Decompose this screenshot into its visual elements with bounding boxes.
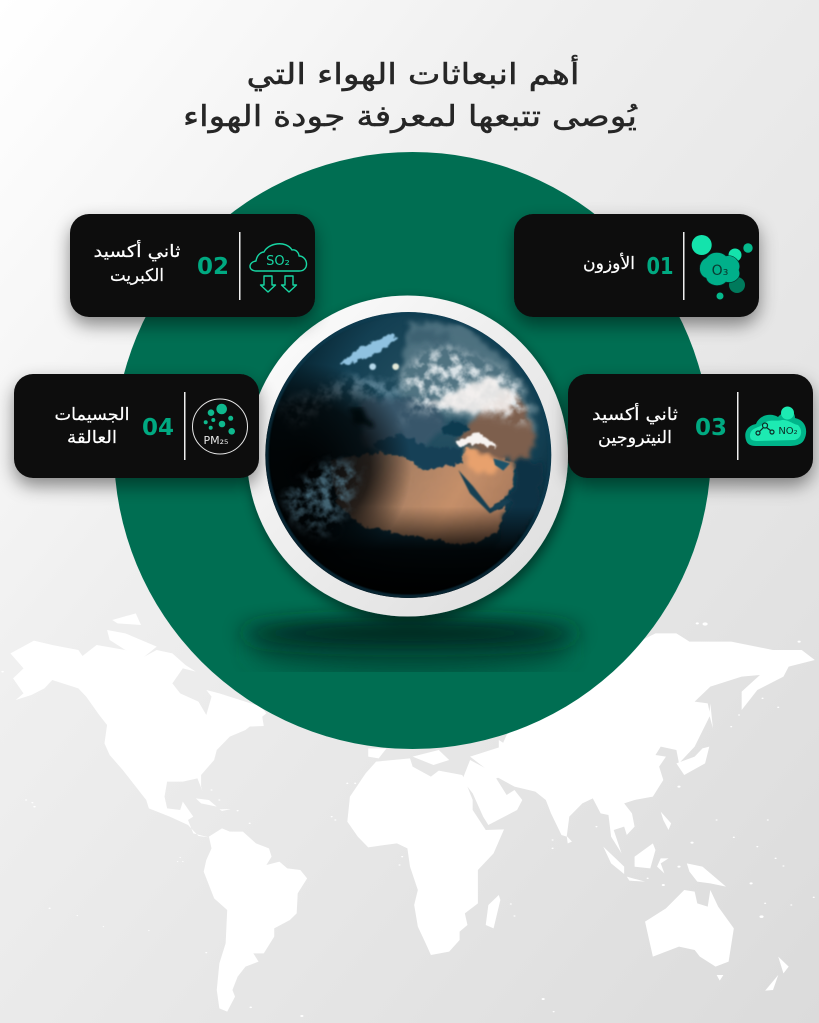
card 04 label: العالقة [67, 428, 117, 448]
card 01 number: 01 [646, 254, 674, 280]
card 03 label: النيتروجين [598, 428, 672, 448]
map: small island dots [1, 622, 815, 1017]
icon: PM2.5 circle [192, 399, 248, 454]
card 02 number: 02 [197, 254, 229, 280]
map: Africa [347, 758, 504, 955]
globe with white ring [205, 296, 568, 616]
white ring [247, 296, 568, 616]
card 02 label [94, 240, 181, 286]
ground shadow under the globe [240, 621, 580, 676]
icon: SO2 cloud with down arrows [250, 244, 307, 292]
card 03 label [592, 403, 678, 448]
card 02 label: ثاني أكسيد [94, 240, 181, 262]
card 04 label [54, 405, 130, 448]
map: South America [204, 828, 307, 1012]
card 03 label: ثاني أكسيد [592, 403, 678, 425]
icon: ozone bubbles [692, 235, 753, 300]
title [183, 54, 638, 133]
icon: NO2 cloud: NO₂ [778, 426, 798, 437]
card 02: sulfur dioxide [70, 214, 315, 317]
map: Arabia [462, 760, 522, 825]
green circle panel [114, 152, 711, 749]
icon: SO2 cloud with down arrows: SO₂ [266, 254, 290, 269]
card 01: ozone [514, 214, 759, 317]
card 03 number: 03 [695, 415, 727, 441]
icon: ozone bubbles: O₃ [712, 263, 728, 279]
title line 1: أهم انبعاثات الهواء التي [246, 54, 580, 92]
icon: PM2.5 circle: PM₂₅ [204, 434, 228, 447]
card 03: nitrogen dioxide [568, 374, 813, 478]
map: Eurasia [470, 633, 815, 853]
card 01 label: الأوزون [583, 253, 635, 274]
map: North America [10, 641, 266, 837]
map: islands [107, 613, 789, 991]
card 04 label: الجسيمات [54, 405, 130, 425]
icon: NO2 cloud [745, 406, 806, 446]
map: Australia [645, 890, 734, 967]
card 04: particulate matter [14, 374, 259, 478]
world map [1, 613, 815, 1017]
card 04 number: 04 [142, 415, 174, 441]
card 02 label: الكبريت [110, 266, 164, 286]
title line 2: يُوصى تتبعها لمعرفة جودة الهواء [183, 99, 638, 133]
earth image [265, 312, 552, 598]
